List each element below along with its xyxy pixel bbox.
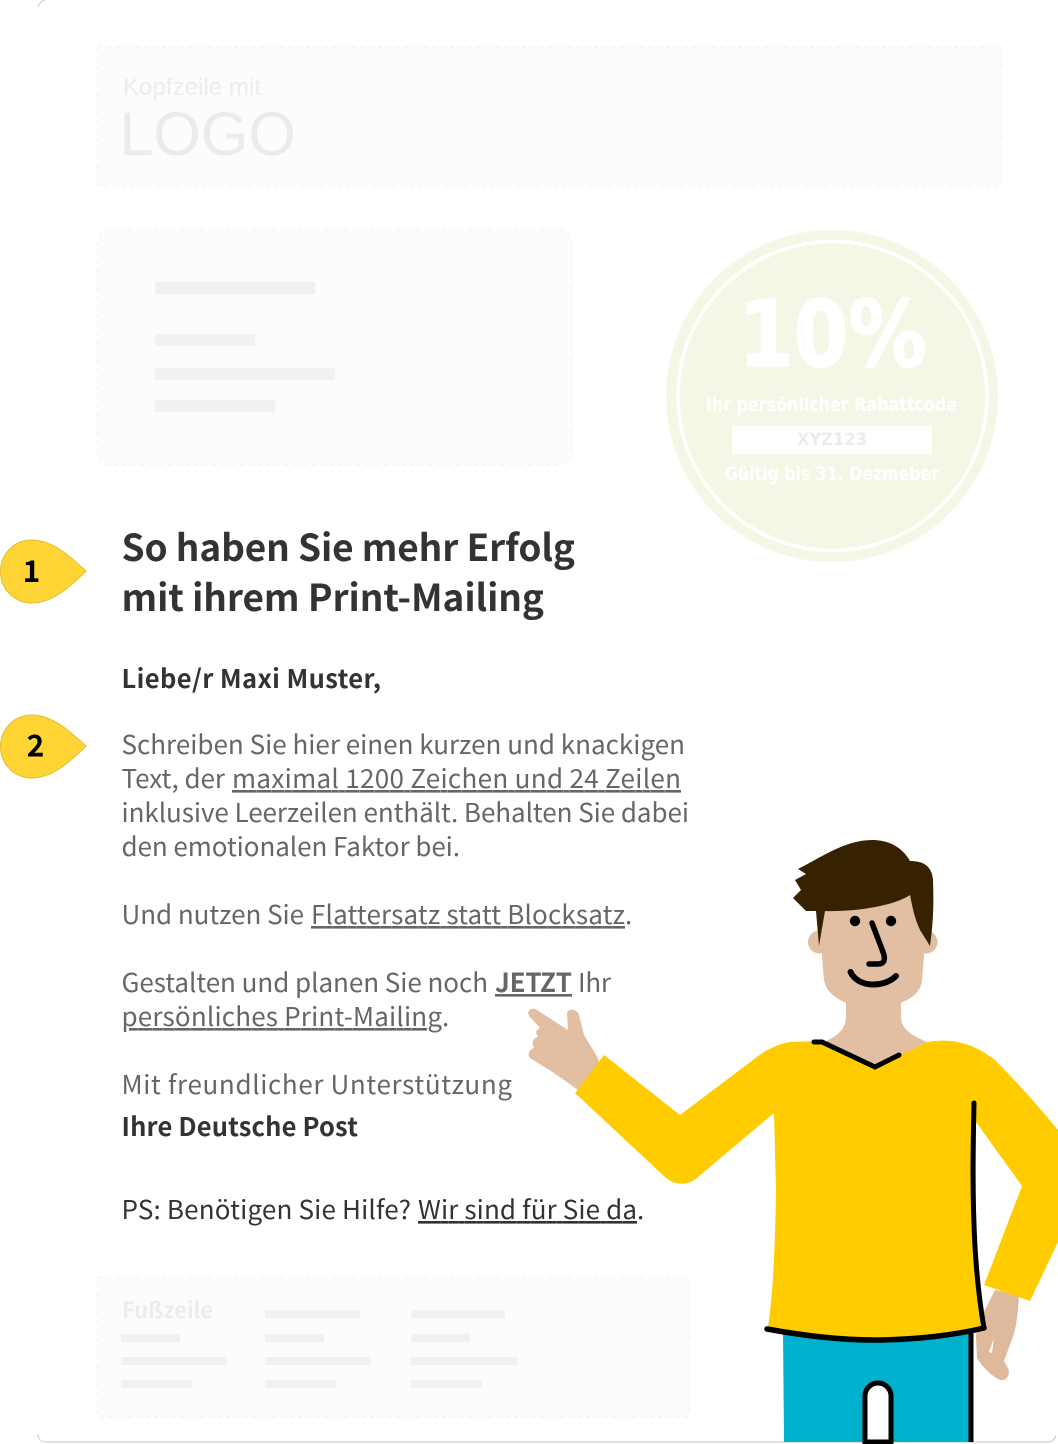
nose bbox=[869, 923, 884, 964]
logo placeholder: LOGO bbox=[120, 100, 296, 168]
neck and face bbox=[820, 890, 932, 1072]
body paragraph 3: . bbox=[442, 997, 449, 1034]
body paragraph 3: persönliches Print-Mailing bbox=[122, 997, 442, 1034]
footer label: Fußzeile bbox=[122, 1293, 213, 1325]
collar bbox=[814, 1042, 899, 1067]
discount code field bbox=[732, 426, 932, 454]
body paragraph 2: . bbox=[625, 895, 632, 932]
postscript: PS: Benötigen Sie Hilfe? bbox=[122, 1190, 411, 1227]
panel: footer placeholder bbox=[97, 1277, 690, 1417]
eyes bbox=[850, 916, 896, 926]
ears bbox=[808, 930, 938, 954]
panel: header placeholder bbox=[97, 47, 1002, 187]
sender: Ihre Deutsche Post bbox=[122, 1107, 358, 1144]
salutation: Liebe/r Maxi Muster, bbox=[122, 659, 381, 696]
discount code label: Ihr persönlicher Rabattcode bbox=[706, 394, 957, 416]
body paragraph 1 bbox=[122, 725, 689, 864]
body paragraph 1: inklusive Leerzeilen enthält. Behalten Sie dabei bbox=[122, 793, 689, 830]
body paragraph 1: Schreiben Sie hier einen kurzen und knackigen bbox=[122, 725, 685, 762]
headline bbox=[122, 518, 575, 622]
hair bbox=[793, 840, 933, 946]
closing: Mit freundlicher Unterstützung bbox=[122, 1065, 512, 1102]
body paragraph 3 bbox=[122, 963, 612, 1034]
postscript: . bbox=[637, 1190, 644, 1227]
sweater hem bbox=[767, 1328, 984, 1340]
headline: mit ihrem Print-Mailing bbox=[122, 568, 544, 622]
postscript bbox=[122, 1190, 644, 1227]
body paragraph 2 bbox=[122, 895, 632, 932]
validity note: Gültig bis 31. Dezmeber bbox=[725, 463, 940, 485]
marker 2 bbox=[0, 715, 86, 778]
body paragraph 2: Flattersatz statt Blocksatz bbox=[311, 895, 625, 932]
header caption: Kopfzeile mit bbox=[123, 74, 261, 101]
headline: So haben Sie mehr Erfolg bbox=[122, 518, 575, 572]
body paragraph 3: JETZT bbox=[495, 963, 572, 1000]
illustration: pointing man bbox=[528, 840, 1058, 1442]
postscript: Wir sind für Sie da bbox=[418, 1190, 637, 1227]
body paragraph 1: maximal 1200 Zeichen und 24 Zeilen bbox=[232, 759, 681, 796]
body paragraph 3: Gestalten und planen Sie noch bbox=[122, 963, 488, 1000]
marker 2: 2 bbox=[27, 722, 44, 766]
marker 1: 1 bbox=[23, 547, 40, 591]
pointing hand bbox=[528, 1009, 600, 1090]
discount value: 10% bbox=[739, 281, 927, 388]
discount badge bbox=[666, 230, 998, 562]
smile bbox=[850, 972, 896, 985]
sweater side line bbox=[973, 1103, 984, 1328]
panel: address placeholder bbox=[97, 230, 573, 465]
sweater bbox=[575, 1041, 1058, 1340]
lower hand bbox=[976, 1290, 1019, 1380]
body paragraph 2: Und nutzen Sie bbox=[122, 895, 304, 932]
trousers bbox=[783, 1330, 972, 1442]
marker 1 bbox=[0, 540, 86, 603]
body paragraph 1: den emotionalen Faktor bei. bbox=[122, 827, 460, 864]
discount code field: XYZ123 bbox=[797, 430, 867, 450]
body paragraph 3: Ihr bbox=[578, 963, 612, 1000]
body paragraph 1: Text, der bbox=[122, 759, 226, 796]
